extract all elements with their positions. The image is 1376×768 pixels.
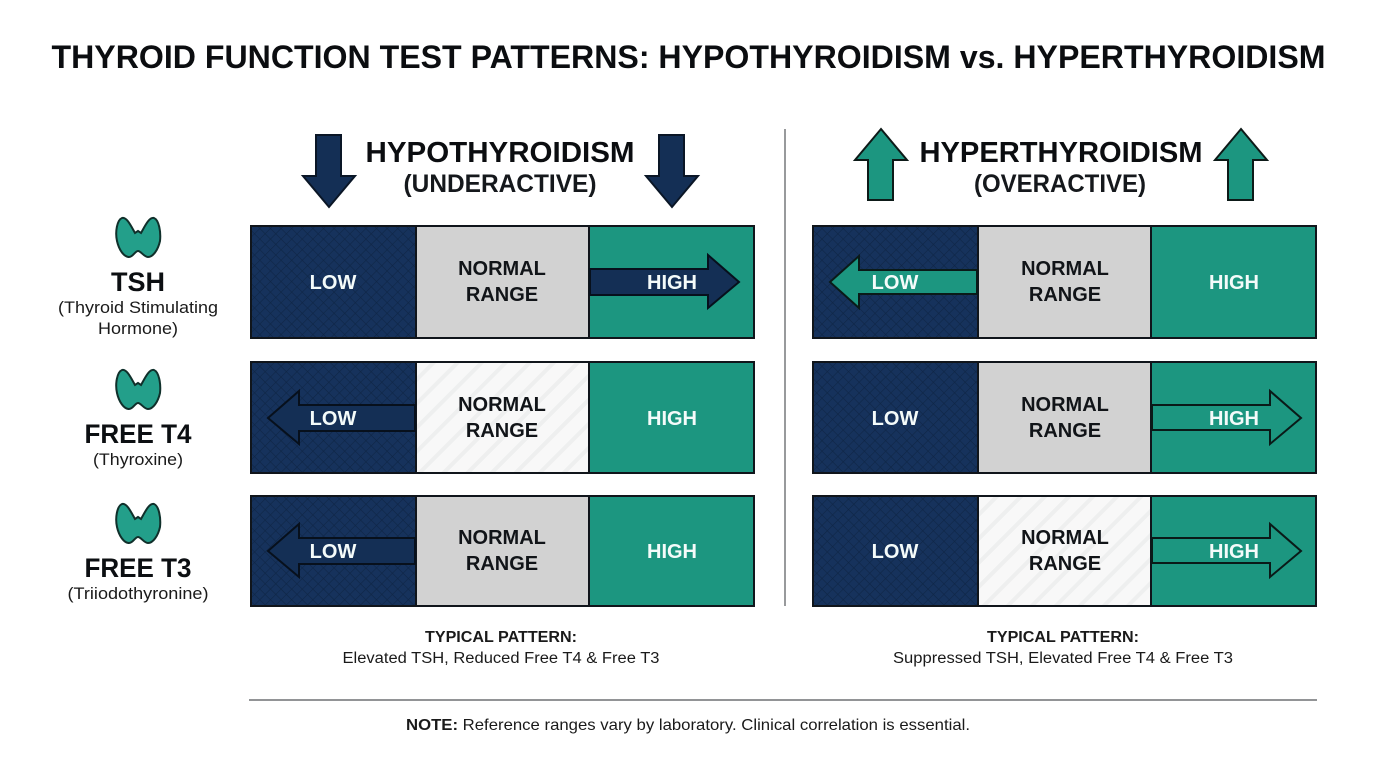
- description: Free T4: (Thyroxine): [93, 450, 183, 469]
- icon: thyroid: [116, 504, 160, 543]
- arrow: low: [830, 256, 977, 308]
- heading: hyperthyroidism: HYPERTHYROIDISM: [920, 137, 1202, 169]
- arrow: low: [268, 391, 415, 444]
- bar: hyper TSH: LOW: [872, 272, 918, 294]
- bar: hyper Free T3: LOW: [872, 541, 918, 563]
- icon: down arrow right: [646, 135, 698, 207]
- text: hypo typical pattern: [342, 629, 660, 667]
- row label: Free T3: [68, 504, 208, 603]
- text: hyper typical pattern: Suppressed TSH, Elevated Free T4 & Free T3: [893, 650, 1233, 667]
- row label: TSH: Hormone): [98, 319, 178, 338]
- divider: [784, 129, 786, 606]
- bar: hyper Free T4: HIGH: [1209, 408, 1259, 430]
- arrow: low: [268, 524, 415, 577]
- bar: hypo TSH: [251, 226, 754, 338]
- row label: TSH: [58, 218, 218, 338]
- text: hyper typical pattern: [893, 629, 1233, 667]
- note: NOTE: Reference ranges vary by laboratory. Clinical correlation is essential.: [406, 717, 970, 734]
- subheading: underactive: (UNDERACTIVE): [404, 170, 596, 198]
- bar: hyper Free T3: [813, 496, 1316, 606]
- icon: up arrow left: [855, 129, 907, 200]
- text: hypo typical pattern: TYPICAL PATTERN:: [425, 629, 577, 646]
- bar: hyper TSH: RANGE: [1029, 284, 1101, 306]
- bar: hyper Free T4: LOW: [872, 408, 918, 430]
- bar: hypo Free T4: HIGH: [647, 408, 697, 430]
- bar: hypo Free T4: NORMAL: [458, 394, 546, 416]
- bar: hyper Free T3: NORMAL: [1021, 527, 1109, 549]
- bar: hyper Free T3: HIGH: [1209, 541, 1259, 563]
- bar: hyper TSH: NORMAL: [1021, 258, 1109, 280]
- title: THYROID FUNCTION TEST PATTERNS: HYPOTHYROIDISM vs. HYPERTHYROIDISM: [52, 39, 1326, 75]
- icon: thyroid: [116, 370, 160, 409]
- arrow: high: [1152, 391, 1301, 444]
- bar: hypo TSH: NORMAL: [458, 258, 546, 280]
- bar: hyper TSH: HIGH: [1209, 272, 1259, 294]
- bar: hyper Free T4: [813, 362, 1316, 473]
- arrow: high: [590, 255, 739, 308]
- bar: hypo Free T3: NORMAL: [458, 527, 546, 549]
- bar: hypo Free T3: [251, 496, 754, 606]
- bar: hypo Free T3: RANGE: [466, 553, 538, 575]
- bar: hyper TSH: [813, 226, 1316, 338]
- name: Free T4: FREE T4: [84, 419, 192, 449]
- bar: hyper Free T3: RANGE: [1029, 553, 1101, 575]
- arrow: high: [1152, 524, 1301, 577]
- heading: hypothyroidism: HYPOTHYROIDISM: [366, 137, 634, 169]
- text: hyper typical pattern: TYPICAL PATTERN:: [987, 629, 1139, 646]
- footer rule: [249, 699, 1317, 701]
- row label: Free T4: [84, 370, 192, 469]
- panel: hyperthyroidism header: [855, 129, 1267, 200]
- name: Free T3: FREE T3: [84, 553, 192, 583]
- description: Free T3: (Triiodothyronine): [68, 584, 208, 603]
- bar: hypo Free T4: RANGE: [466, 420, 538, 442]
- text: hypo typical pattern: Elevated TSH, Reduced Free T4 & Free T3: [342, 650, 660, 667]
- description: TSH: (Thyroid Stimulating: [58, 298, 218, 317]
- panel: hypothyroidism header: [303, 135, 698, 207]
- bar: hypo Free T3: LOW: [310, 541, 356, 563]
- bar: hypo Free T4: LOW: [310, 408, 356, 430]
- icon: down arrow left: [303, 135, 355, 207]
- subheading: overactive: (OVERACTIVE): [974, 170, 1146, 198]
- icon: thyroid: [116, 218, 160, 257]
- icon: up arrow right: [1215, 129, 1267, 200]
- bar: hypo TSH: HIGH: [647, 272, 697, 294]
- bar: hypo Free T3: HIGH: [647, 541, 697, 563]
- bar: hypo TSH: RANGE: [466, 284, 538, 306]
- bar: hypo Free T4: [251, 362, 754, 473]
- name: TSH: TSH: [111, 267, 165, 297]
- bar: hyper Free T4: NORMAL: [1021, 394, 1109, 416]
- bar: hypo TSH: LOW: [310, 272, 356, 294]
- bar: hyper Free T4: RANGE: [1029, 420, 1101, 442]
